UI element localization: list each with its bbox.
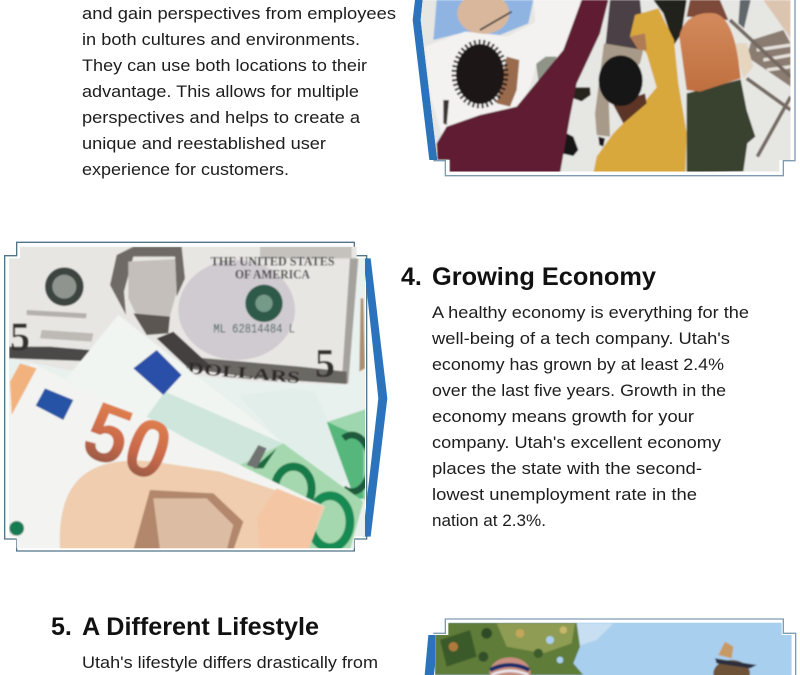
text block: section 3 body continued: advantage. This allows for multiple [82,82,359,101]
banknote photo [7,245,378,552]
frame lines [5,242,367,551]
blue accent shape [425,635,438,675]
banknote photo: 50 [72,384,183,499]
text block: section 3 body continued: experience for customers. [82,160,289,179]
text block: section 3 body continued: perspectives and helps to create a [82,108,361,127]
banknote photo: OF AMERICA [235,267,311,281]
text block: section 3 body continued: unique and reestablished user [82,134,326,153]
text block: section 4 body: economy means growth for your [432,407,694,426]
heading: 5. A Different Lifestyle: 5. [51,613,72,641]
photo of trees, sky and people [433,620,793,675]
heading: 5. A Different Lifestyle: A Different Lifestyle [82,613,319,641]
banknote photo: 5 [10,314,30,359]
text block: section 4 body: well-being of a tech company. Utah's [431,329,730,348]
text block: section 3 body continued: in both cultures and environments. [82,30,360,49]
text block: section 4 body [431,303,749,530]
frame lines [433,619,796,675]
text block: section 3 body continued: They can use both locations to their [82,56,367,75]
text block: section 4 body: over the last five years. Growth in the [432,381,726,400]
banknote photo: DOLLARS [186,358,301,387]
text block: section 3 body continued [82,4,396,179]
photo panel: dollar and euro banknotes [5,242,387,552]
heading: 4. Growing Economy: 4. [401,263,422,291]
text block: section 4 body: economy has grown by at least 2.4% [432,355,724,374]
text block: section 5 body: Utah's lifestyle differs drastically from [82,653,378,672]
banknote photo: 5 [315,341,335,386]
frame lines [433,0,795,176]
heading: 4. Growing Economy: Growing Economy [432,263,656,291]
blue chevron accent [363,258,387,537]
banknote photo: ML 62814484 L [213,322,295,337]
photo of people [417,0,793,173]
text block: section 3 body continued: and gain perspectives from employees [82,4,396,23]
photo panel: team raising hands [413,0,795,176]
text block: section 4 body: places the state with the second- [432,459,702,478]
text block: section 4 body: nation at 2.3%. [432,511,546,530]
text block: section 4 body: lowest unemployment rate in the [432,485,697,504]
text block: section 4 body: A healthy economy is everything for the [432,303,749,322]
text block: section 4 body: company. Utah's excellent economy [432,433,722,452]
blue accent shape [413,0,437,160]
photo panel: outdoor lifestyle [425,619,796,675]
banknote photo: THE UNITED STATES [211,255,335,269]
